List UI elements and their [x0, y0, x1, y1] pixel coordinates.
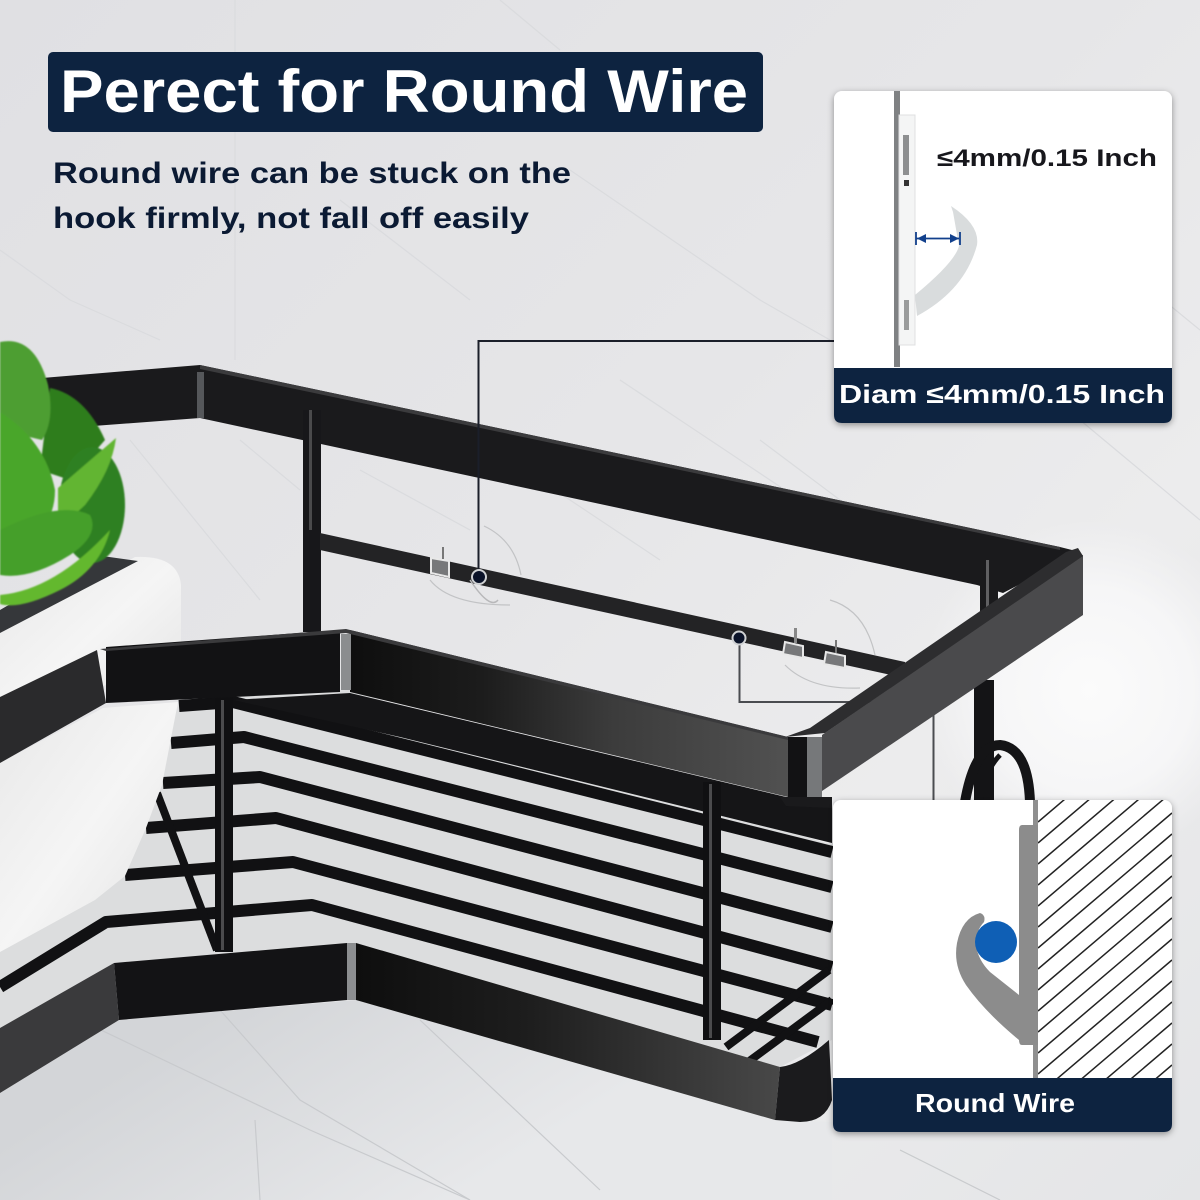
- shelf: bottom rail: [0, 943, 832, 1122]
- description text: hook firmly, not fall off easily: [53, 202, 529, 235]
- caption bar: [833, 1078, 1172, 1132]
- panel: round wire cross-section: [828, 798, 1176, 1138]
- rear posts: [303, 410, 998, 805]
- shelf: vertical bars: [215, 698, 721, 1040]
- callout dot: round wire: [732, 632, 746, 644]
- planter pot: [0, 555, 181, 720]
- suction hooks on wire: [430, 526, 875, 688]
- wall hatching: [1038, 800, 1172, 1078]
- caption text: Diam ≤4mm/0.15 Inch: [839, 379, 1165, 409]
- lower pot body: [0, 702, 178, 952]
- wall surface: [1033, 800, 1038, 1078]
- back horizontal wire: [320, 533, 905, 678]
- description text: Round wire can be stuck on the: [53, 157, 571, 190]
- dimension label: ≤4mm/0.15 Inch: [937, 145, 1157, 172]
- hook cross-section: [956, 825, 1038, 1045]
- shelf: upper front rail: [0, 629, 832, 843]
- description text: [53, 157, 571, 235]
- title banner: [48, 52, 763, 132]
- round wire dot: [975, 921, 1017, 963]
- callout line: top hook: [478, 341, 835, 578]
- hook front view: [899, 115, 977, 345]
- callout line: round wire: [740, 640, 934, 800]
- panel: wire diameter hook: [834, 91, 1172, 423]
- wall strip: [894, 91, 900, 367]
- dimension arrow: [916, 232, 960, 245]
- callout dot: top wire: [472, 570, 486, 584]
- succulent plant: [0, 341, 125, 605]
- shelf: back rail: [30, 365, 1080, 593]
- title text: Perect for Round Wire: [60, 58, 748, 125]
- hanging ring hook: [965, 745, 1030, 802]
- shelf wires: [0, 702, 832, 1062]
- shelf: right rail and corner: [780, 548, 1083, 808]
- caption text: Round Wire: [915, 1088, 1075, 1118]
- caption bar: [834, 368, 1172, 423]
